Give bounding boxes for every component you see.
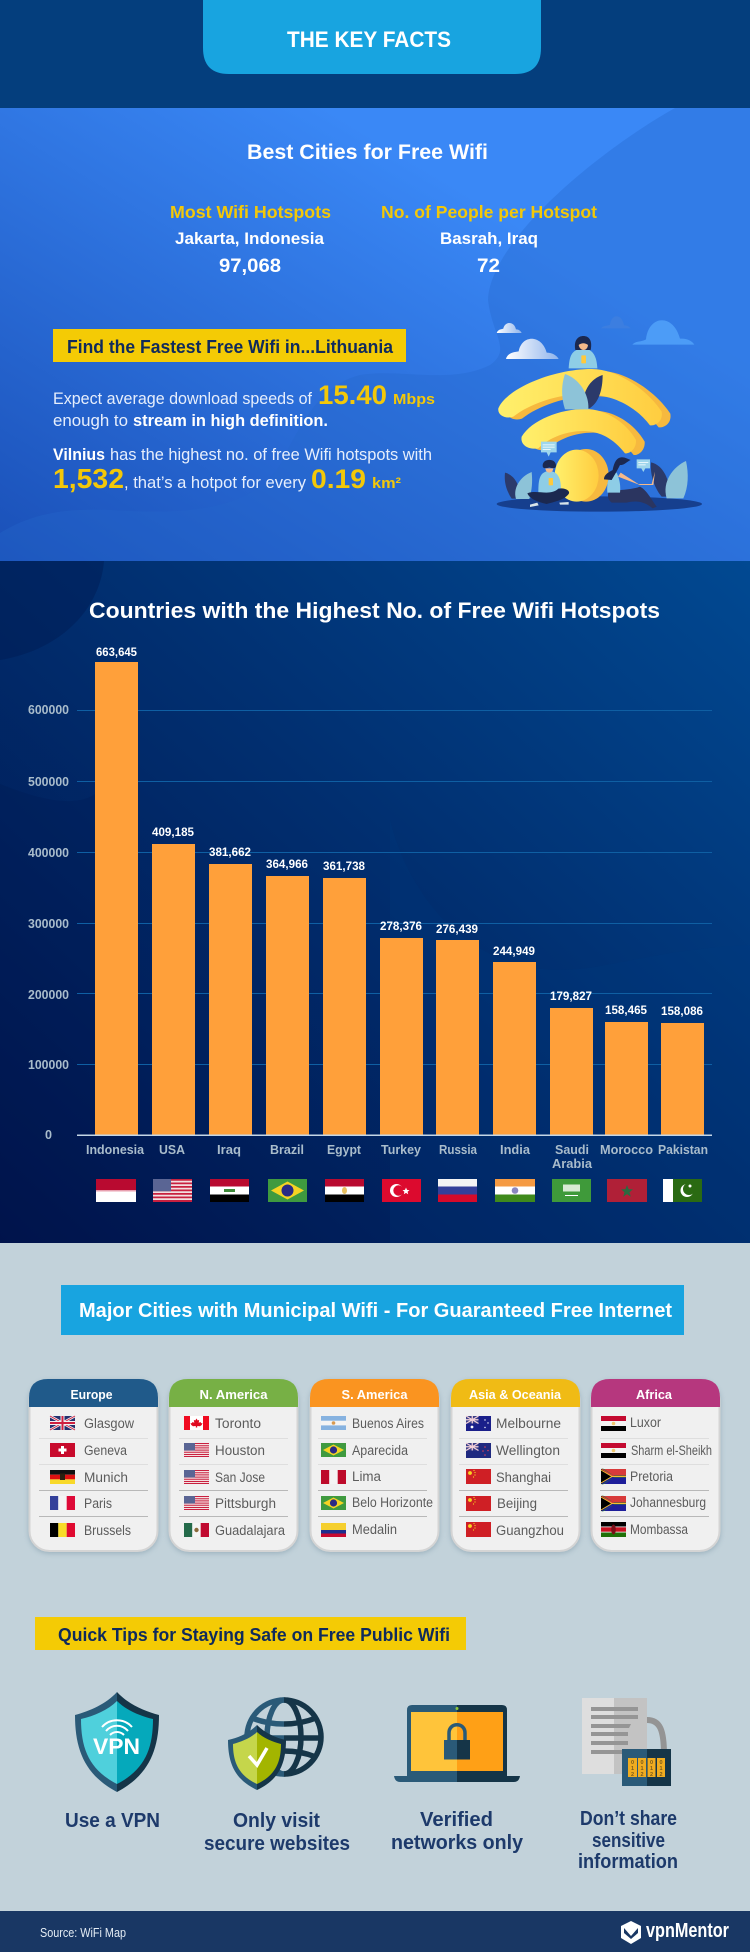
- card: S. America: Buenos Aires: [352, 1416, 424, 1431]
- left seated person: [527, 460, 569, 507]
- text block: vilnius hotspots: Vilnius: [53, 445, 105, 464]
- text block: vilnius hotspots: , that’s a hotpot for every: [124, 473, 306, 492]
- flag: South Africa: [601, 1495, 626, 1512]
- stat: most wifi hotspots: 97,068: [219, 256, 281, 277]
- icon: laptop with lock: [394, 1705, 520, 1782]
- y axis labels and grid: [28, 703, 712, 1142]
- y axis labels and grid: 0: [45, 1128, 52, 1142]
- flag: USA: [184, 1496, 209, 1510]
- clouds: [497, 316, 694, 359]
- card: Asia and Oceania: Melbourne: [496, 1416, 561, 1431]
- icon: document and padlock: 1: [660, 1766, 663, 1772]
- flag: Pakistan: [663, 1179, 702, 1202]
- card: Asia and Oceania: Wellington: [496, 1443, 560, 1458]
- flag: Mexico: [184, 1523, 209, 1537]
- flag: China: [466, 1496, 491, 1511]
- y axis labels and grid: 100000: [28, 1058, 69, 1072]
- flag: China: [466, 1469, 491, 1484]
- value labels: 158,465: [605, 1003, 647, 1017]
- stat: people per hotspot: Basrah, Iraq: [440, 230, 538, 248]
- y axis labels and grid: 600000: [28, 703, 69, 717]
- country flags: [96, 1179, 702, 1202]
- icon: document and padlock: 0: [650, 1760, 653, 1766]
- panel: municipal wifi cities: [0, 1243, 750, 1911]
- tip: use a VPN: Use a VPN: [65, 1810, 160, 1832]
- card: Europe: Paris: [84, 1496, 112, 1511]
- country labels: Russia: [439, 1143, 478, 1157]
- flag: Turkey: [382, 1179, 421, 1202]
- card: N. America: [169, 1379, 298, 1553]
- text block: download speeds: Mbps: [393, 391, 435, 408]
- card: Africa: Pretoria: [630, 1469, 673, 1484]
- y axis labels and grid: 300000: [28, 917, 69, 931]
- country labels: Saudi: [555, 1143, 589, 1157]
- logo: vpnMentor: vpnMentor: [646, 1920, 729, 1942]
- card: S. America: [310, 1379, 439, 1553]
- wifi arcs: [498, 369, 671, 502]
- text block: download speeds: stream in high definition.: [133, 411, 328, 430]
- card: Asia and Oceania: Guangzhou: [496, 1523, 564, 1538]
- country labels: Egypt: [327, 1143, 362, 1157]
- y axis labels and grid: 500000: [28, 775, 69, 789]
- text block: download speeds: [53, 380, 435, 430]
- flag: Brazil: [321, 1443, 346, 1457]
- flag: Morocco: [607, 1179, 647, 1202]
- ground: [497, 496, 702, 512]
- flag: USA: [153, 1179, 192, 1202]
- bars: [95, 662, 704, 1135]
- flag: Germany: [50, 1470, 75, 1484]
- card: N. America: Houston: [215, 1443, 265, 1458]
- text block: download speeds: enough to: [53, 411, 128, 430]
- tip: sensitive information: sensitive: [592, 1830, 665, 1852]
- text block: vilnius hotspots: 1,532: [53, 463, 124, 494]
- right seated woman: [604, 457, 657, 508]
- value labels: 278,376: [380, 919, 422, 933]
- country labels: Turkey: [381, 1143, 421, 1157]
- x axis line: [77, 1134, 712, 1136]
- card: Europe: Geneva: [84, 1443, 127, 1458]
- flag: Argentina: [321, 1416, 346, 1430]
- flag: Colombia: [321, 1523, 346, 1537]
- tip: secure websites: Only visit: [233, 1810, 320, 1832]
- country labels: Morocco: [600, 1143, 653, 1157]
- flag: Iraq: [210, 1179, 249, 1202]
- icon: document and padlock: 1: [650, 1766, 653, 1772]
- value labels: 409,185: [152, 825, 194, 839]
- card: Africa: Johannesburg: [630, 1495, 706, 1510]
- text block: download speeds: Expect average download speeds of: [53, 389, 312, 408]
- stat: most wifi hotspots: [170, 202, 331, 277]
- tip: sensitive information: information: [578, 1851, 678, 1873]
- flag: Australia: [466, 1416, 491, 1431]
- footer: [0, 1911, 750, 1952]
- panel: quick tips: [35, 1617, 678, 1873]
- card: S. America: S. America: [342, 1387, 408, 1402]
- card: N. America: N. America: [200, 1387, 268, 1402]
- flag: Egypt: [601, 1443, 626, 1458]
- value labels: 361,738: [323, 859, 365, 873]
- banner: quick tips: [35, 1617, 466, 1650]
- country labels: [86, 1143, 708, 1171]
- value labels: 158,086: [661, 1004, 703, 1018]
- value labels: 179,827: [550, 989, 592, 1003]
- flag: USA: [184, 1470, 209, 1484]
- icon: document and padlock: 0: [640, 1760, 644, 1766]
- icon: globe with shield: [228, 1700, 321, 1790]
- flag: Egypt: [325, 1179, 364, 1202]
- flag: Brazil: [321, 1496, 346, 1510]
- stat: most wifi hotspots: Most Wifi Hotspots: [170, 202, 331, 222]
- country labels: Brazil: [270, 1143, 304, 1157]
- country labels: Iraq: [217, 1143, 241, 1157]
- flag: Switzerland: [50, 1443, 75, 1457]
- icon: document and padlock: 1: [631, 1766, 634, 1772]
- card: S. America: Medalin: [352, 1522, 397, 1537]
- value labels: 244,949: [493, 944, 535, 958]
- icon: document and padlock: 2: [660, 1772, 663, 1778]
- banner: municipal wifi: [61, 1285, 684, 1335]
- flag: France: [50, 1496, 75, 1510]
- card: S. America: Lima: [352, 1469, 381, 1484]
- tip: verified networks: networks only: [391, 1832, 524, 1854]
- card: Europe: Glasgow: [84, 1416, 134, 1431]
- text block: download speeds: 15.40: [318, 380, 387, 410]
- banner: quick tips: Quick Tips for Staying Safe on Free Public Wifi: [58, 1624, 450, 1645]
- icon: document and padlock: 2: [650, 1772, 653, 1778]
- card: S. America: Belo Horizonte: [352, 1495, 433, 1510]
- text block: vilnius hotspots: km²: [372, 475, 401, 492]
- flag: Kenya: [601, 1522, 626, 1537]
- tip: verified networks: Verified: [420, 1809, 493, 1831]
- flag: Russia: [438, 1179, 477, 1202]
- text block: vilnius hotspots: 0.19: [311, 464, 366, 494]
- card: Africa: Mombassa: [630, 1522, 688, 1537]
- illustration: people around wifi symbol: [497, 316, 702, 512]
- flag: India: [495, 1179, 535, 1202]
- card: Africa: Sharm el-Sheikh: [631, 1443, 712, 1458]
- card: Asia and Oceania: Shanghai: [496, 1470, 551, 1485]
- tip: sensitive information: Don’t share: [580, 1808, 677, 1830]
- text block: vilnius hotspots: has the highest no. of free Wifi hotspots with: [110, 445, 432, 464]
- value labels: 276,439: [436, 922, 478, 936]
- source note: Source: WiFi Map: [40, 1926, 126, 1940]
- heading: best cities: Best Cities for Free Wifi: [247, 141, 488, 164]
- flag: Egypt: [601, 1416, 626, 1431]
- icon: document and padlock: 1: [640, 1766, 644, 1772]
- icon: VPN shield: [75, 1692, 159, 1792]
- flag: China: [466, 1522, 491, 1537]
- flag: New Zealand: [466, 1443, 491, 1458]
- stat: people per hotspot: No. of People per Hotspot: [381, 202, 597, 222]
- icon: document and padlock: 2: [640, 1772, 644, 1778]
- country labels: Indonesia: [86, 1143, 145, 1157]
- card: Europe: [29, 1379, 158, 1553]
- card: Asia and Oceania: Asia & Oceania: [469, 1387, 562, 1402]
- card: N. America: Toronto: [215, 1416, 261, 1431]
- card: S. America: Aparecida: [352, 1443, 408, 1458]
- flag: USA: [184, 1443, 209, 1457]
- flag: Indonesia: [96, 1179, 136, 1202]
- tip: verified networks: [391, 1809, 524, 1854]
- flag: UK: [50, 1416, 75, 1430]
- logo: vpnMentor: [621, 1920, 729, 1944]
- stat: most wifi hotspots: Jakarta, Indonesia: [175, 230, 325, 248]
- person on top: [569, 336, 597, 368]
- flag: Belgium: [50, 1523, 75, 1537]
- flag: Canada: [184, 1416, 209, 1430]
- icon: document and padlock: [582, 1698, 671, 1786]
- panel: countries bar chart: [0, 561, 750, 1243]
- flag: South Africa: [601, 1468, 626, 1485]
- stat: people per hotspot: 72: [477, 256, 500, 277]
- country labels: Arabia: [552, 1157, 593, 1171]
- card: N. America: San Jose: [215, 1470, 265, 1485]
- heading: chart title: Countries with the Highest No. of Free Wifi Hotspots: [89, 598, 660, 623]
- card: Asia and Oceania: [451, 1379, 580, 1553]
- title: THE KEY FACTS: [287, 27, 451, 52]
- country labels: Pakistan: [658, 1143, 708, 1157]
- card: Asia and Oceania: Beijing: [497, 1496, 537, 1511]
- value labels: 364,966: [266, 857, 308, 871]
- country labels: USA: [159, 1143, 185, 1157]
- value labels: 381,662: [209, 845, 251, 859]
- flag: Peru: [321, 1470, 346, 1484]
- card: N. America: Pittsburgh: [215, 1496, 276, 1511]
- stat: people per hotspot: [381, 202, 597, 277]
- icon: document and padlock: 2: [631, 1772, 634, 1778]
- panel: best cities for free wifi: [0, 108, 750, 561]
- card: Africa: Luxor: [630, 1415, 661, 1430]
- tip: sensitive information: [578, 1808, 678, 1873]
- text block: vilnius hotspots: [53, 445, 432, 494]
- flag: Saudi Arabia: [552, 1179, 591, 1202]
- tip: secure websites: [204, 1810, 350, 1855]
- title tab: [203, 0, 541, 74]
- card: Europe: Brussels: [84, 1523, 131, 1538]
- card: Africa: Africa: [636, 1387, 673, 1402]
- card: N. America: Guadalajara: [215, 1523, 285, 1538]
- header band: [0, 0, 750, 108]
- card: Europe: Europe: [70, 1387, 112, 1402]
- chat bubbles: [541, 442, 650, 472]
- country labels: India: [500, 1143, 531, 1157]
- icon: document and padlock: 0: [631, 1760, 634, 1766]
- icon: VPN shield: VPN: [93, 1734, 140, 1759]
- tip: secure websites: secure websites: [204, 1833, 350, 1855]
- y axis labels and grid: 400000: [28, 846, 69, 860]
- card: Africa: [591, 1379, 720, 1553]
- card: Europe: Munich: [84, 1470, 128, 1485]
- value labels: [96, 645, 703, 1018]
- icon: document and padlock: 0: [660, 1760, 663, 1766]
- leaves: [505, 374, 688, 499]
- flag: Brazil: [268, 1179, 307, 1202]
- callout: fastest free wifi: [53, 329, 406, 362]
- callout: fastest free wifi: Find the Fastest Free Wifi in...Lithuania: [67, 336, 394, 357]
- y axis labels and grid: 200000: [28, 988, 69, 1002]
- banner: municipal wifi: Major Cities with Municipal Wifi - For Guaranteed Free Internet: [79, 1300, 672, 1322]
- value labels: 663,645: [96, 645, 137, 659]
